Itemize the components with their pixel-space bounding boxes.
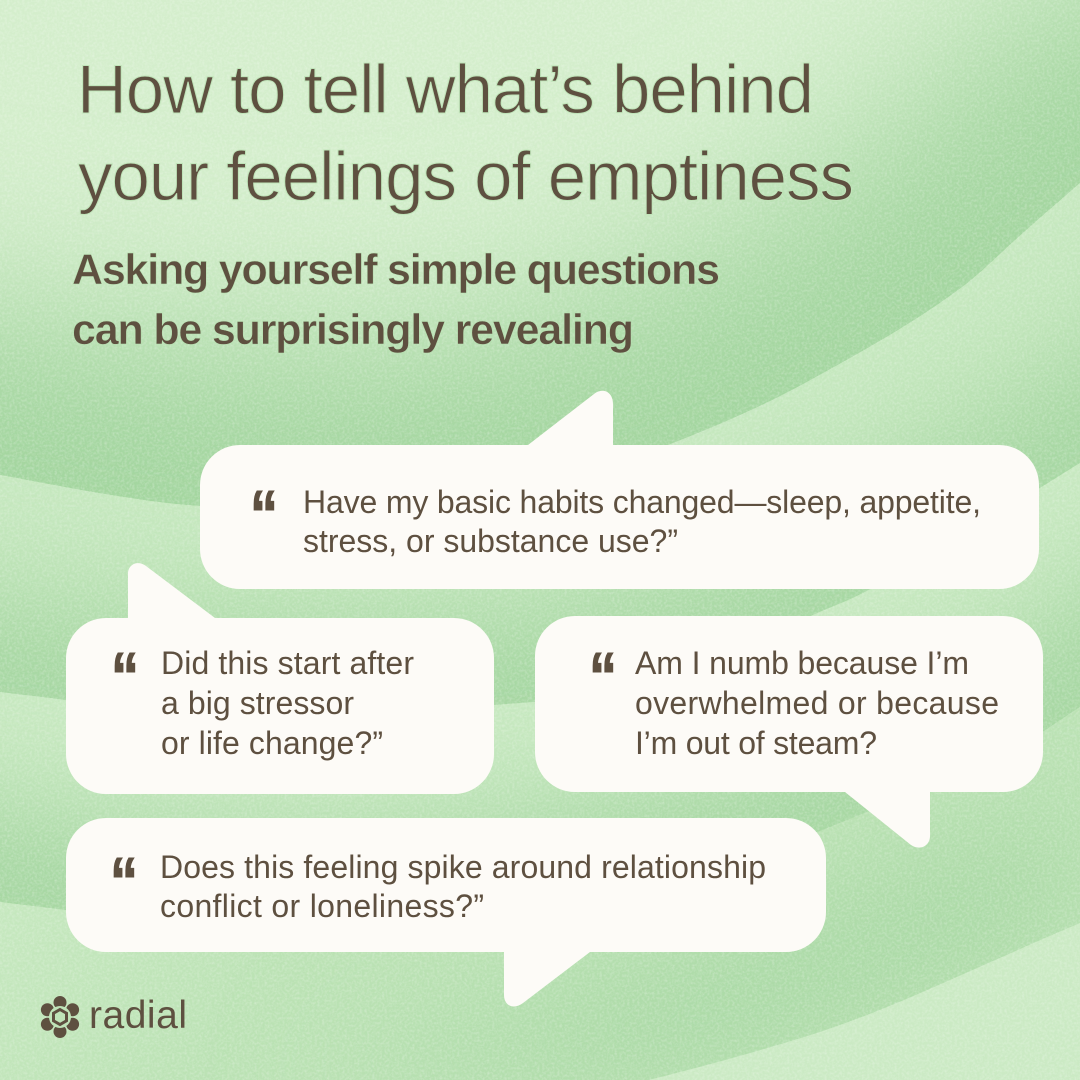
title <box>77 51 854 215</box>
subtitle: can be surprisingly revealing <box>72 306 634 354</box>
speech bubble: basic habits: stress, or substance use?” <box>303 523 678 559</box>
speech bubble: numb: I’m out of steam? <box>635 725 877 761</box>
speech bubble: basic habits: Have my basic habits changed—sleep, appetite, <box>303 484 981 520</box>
icon: flower mark <box>41 996 79 1038</box>
speech bubble: numb: overwhelmed or because <box>635 685 999 721</box>
subtitle: Asking yourself simple questions <box>72 246 720 294</box>
speech bubble: relationship conflict: Does this feeling spike around relationship <box>160 849 766 885</box>
logo: radial <box>41 994 187 1038</box>
speech bubble: relationship conflict <box>66 818 826 1006</box>
speech bubble: numb <box>535 616 1043 848</box>
speech bubble: big stressor: “ <box>111 639 139 714</box>
speech bubble: numb: “ <box>589 639 617 714</box>
speech bubble: numb: Am I numb because I’m <box>635 645 969 681</box>
logo: radial: radial <box>89 994 187 1037</box>
subtitle <box>72 246 720 354</box>
title: your feelings of emptiness <box>78 138 854 215</box>
speech bubble: relationship conflict: “ <box>110 844 138 919</box>
speech bubble: big stressor: Did this start after <box>161 645 414 681</box>
speech bubble: basic habits <box>200 391 1039 589</box>
title: How to tell what’s behind <box>77 51 814 128</box>
speech bubble: big stressor: or life change?” <box>161 725 383 761</box>
speech bubble: big stressor: a big stressor <box>161 685 354 721</box>
speech bubble: relationship conflict: conflict or loneliness?” <box>160 888 484 924</box>
speech bubble: big stressor <box>66 563 494 794</box>
speech bubble: basic habits: “ <box>250 477 278 552</box>
